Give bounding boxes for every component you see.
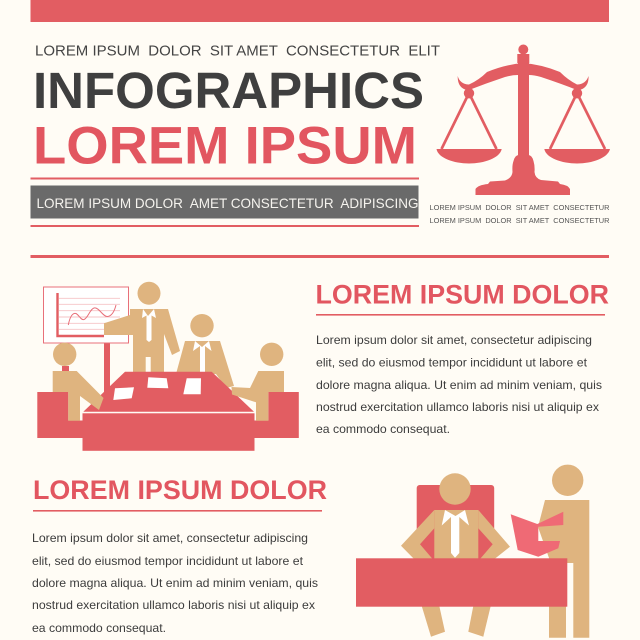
conference table [68, 372, 268, 451]
body text: right [316, 333, 602, 436]
small caption: LOREM IPSUM DOLOR SIT AMET CONSECTETUR [430, 203, 610, 212]
right chair [268, 392, 299, 438]
small caption [430, 203, 610, 225]
illustration: desk and assistant [356, 465, 589, 638]
chart board stand [104, 342, 110, 397]
presenter standing [104, 282, 180, 374]
body text: left: ea commodo consequat. [32, 621, 166, 635]
seated person right [232, 343, 284, 421]
office chair [417, 485, 494, 560]
section heading: left: LOREM IPSUM DOLOR [33, 475, 327, 505]
body text: left: nostrud exercitation ullamco laboris nisi ut aliquip ex [32, 598, 315, 612]
papers on table [113, 377, 201, 400]
open book [511, 512, 563, 557]
body text: right: elit, sed do eiusmod tempor incididunt ut labore et [316, 356, 588, 370]
body text: left: dolore magna aliqua. Ut enim ad minim veniam, quis [32, 576, 318, 590]
section heading: right: LOREM IPSUM DOLOR [316, 280, 609, 310]
body text: right: dolore magna aliqua. Ut enim ad minim veniam, quis [316, 378, 602, 392]
chart board [44, 287, 128, 343]
small caption: LOREM IPSUM DOLOR SIT AMET CONSECTETUR [430, 216, 610, 225]
body text: right: ea commodo consequat. [316, 422, 450, 436]
colleague standing behind table [176, 314, 234, 388]
seated person left [53, 343, 104, 421]
icon: balance scales [436, 44, 610, 195]
illustration: business meeting [37, 282, 299, 451]
left chair [37, 392, 68, 438]
top banner bar [30, 0, 609, 22]
body text: right: Lorem ipsum dolor sit amet, consectetur adipiscing [316, 333, 592, 347]
body text: right: nostrud exercitation ullamco laboris nisi ut aliquip ex [316, 400, 599, 414]
header tagline: LOREM IPSUM DOLOR SIT AMET CONSECTETUR ELIT [35, 44, 440, 60]
body text: left [32, 531, 318, 635]
subtitle band [30, 178, 419, 227]
section divider [30, 255, 609, 258]
body text: left: Lorem ipsum dolor sit amet, consectetur adipiscing [32, 531, 308, 545]
standing assistant [538, 465, 589, 638]
title: infographics: INFOGRAPHICS [33, 62, 424, 119]
desk [356, 558, 567, 607]
body text: left: elit, sed do eiusmod tempor incididunt ut labore et [32, 554, 304, 568]
title: lorem ipsum: LOREM IPSUM [33, 116, 417, 175]
seated manager [401, 473, 510, 637]
subtitle band: LOREM IPSUM DOLOR AMET CONSECTETUR ADIPISCING [36, 195, 418, 211]
